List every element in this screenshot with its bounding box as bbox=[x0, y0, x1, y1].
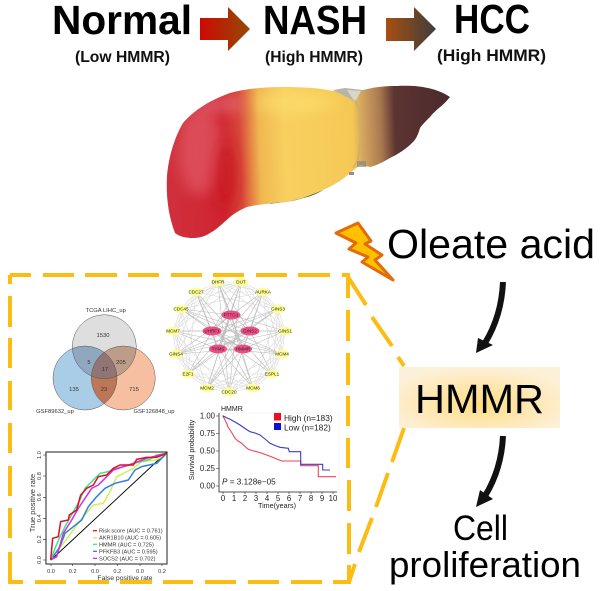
chart: protein interaction network: GINS4 bbox=[169, 352, 183, 357]
chart: ROC curves bbox=[28, 451, 167, 582]
chart: protein interaction network: MCM4 bbox=[275, 352, 289, 357]
chart: survival curve: 7 bbox=[298, 494, 302, 503]
chart: survival curve: 3 bbox=[254, 494, 258, 503]
panel: dashed callout frame bbox=[10, 275, 404, 582]
chart: survival curve: HMMR bbox=[221, 406, 243, 413]
chart: Venn diagram: GSF126848_up bbox=[134, 409, 174, 415]
chart: Venn diagram: 17 bbox=[102, 367, 108, 373]
text: Cell proliferation bbox=[389, 509, 581, 585]
text: Oleate acid: Oleate acid bbox=[387, 221, 595, 267]
chart: survival curve: Survival probability bbox=[187, 419, 196, 480]
chart: protein interaction network bbox=[166, 278, 292, 396]
chart: survival curve: 6 bbox=[287, 494, 291, 503]
chart: survival curve: 0.00 bbox=[200, 482, 216, 490]
arrow: Normal to NASH bbox=[200, 7, 250, 51]
chart: survival curve: 0.50 bbox=[200, 446, 216, 456]
chart: survival curve: Low (n=182) bbox=[284, 422, 331, 432]
chart: ROC curves: 0.8 bbox=[37, 472, 43, 480]
chart: ROC curves: AKR1B10 (AUC = 0.605) bbox=[99, 536, 161, 542]
chart: ROC curves: Risk score (AUC = 0.761) bbox=[99, 529, 163, 535]
arrow: HMMR to cell proliferation bbox=[476, 436, 503, 507]
chart: protein interaction network: CDC45 bbox=[173, 307, 189, 312]
chart: protein interaction network: UHRF1 bbox=[204, 329, 220, 334]
chart: ROC curves: 0.2 bbox=[158, 569, 166, 575]
chart: protein interaction network: TYMS bbox=[212, 347, 224, 352]
arrow: Oleate acid to HMMR bbox=[476, 282, 503, 353]
chart: ROC curves: False positive rate bbox=[97, 575, 153, 582]
chart: survival curve: 0 bbox=[221, 494, 226, 503]
chart: survival curve bbox=[187, 406, 339, 510]
chart: survival curve: 9 bbox=[320, 494, 324, 503]
chart: Venn diagram: 205 bbox=[116, 360, 126, 366]
chart: protein interaction network: MCM7 bbox=[166, 329, 180, 334]
chart: survival curve: Time(years) bbox=[258, 501, 296, 510]
chart: survival curve: 2 bbox=[243, 494, 247, 503]
chart: survival curve: 0.25 bbox=[200, 464, 216, 473]
chart: ROC curves: PFKFB3 (AUC = 0.595) bbox=[99, 549, 158, 555]
chart: protein interaction network: HMMR bbox=[236, 347, 251, 352]
chart: Venn diagram: GSF89632_up bbox=[36, 409, 74, 415]
chart: survival curve: High (n=183) bbox=[284, 413, 333, 423]
chart: ROC curves: 0.0 bbox=[91, 569, 99, 575]
chart: protein interaction network: GINS2 bbox=[243, 329, 257, 334]
chart: survival curve: 0.75 bbox=[200, 429, 216, 438]
chart: survival curve: 10 bbox=[329, 494, 338, 503]
chart: ROC curves: HMMR (AUC = 0.725) bbox=[99, 542, 154, 548]
chart: Venn diagram bbox=[36, 308, 174, 415]
chart: ROC curves: 1.0 bbox=[37, 451, 43, 459]
chart: Venn diagram: 23 bbox=[101, 387, 107, 393]
chart: ROC curves: 0.0 bbox=[37, 556, 43, 564]
chart: survival curve: 5 bbox=[276, 494, 281, 503]
chart: Venn diagram: TCGA LIHC_up bbox=[86, 308, 126, 314]
chart: protein interaction network: CDC20 bbox=[221, 390, 237, 395]
chart: survival curve: 4 bbox=[265, 494, 270, 503]
chart: protein interaction network: ESPL1 bbox=[265, 372, 280, 377]
chart: protein interaction network: CDC27 bbox=[188, 290, 204, 295]
chart: ROC curves: True positive rate bbox=[28, 474, 37, 532]
chart: Venn diagram: 715 bbox=[129, 387, 139, 393]
chart: survival curve: 8 bbox=[309, 494, 313, 503]
chart: ROC curves: 0.2 bbox=[113, 569, 121, 575]
chart: survival curve: P = 3.128e−05 bbox=[222, 478, 276, 486]
chart: ROC curves: 0.2 bbox=[69, 569, 77, 575]
title: Normal stage bbox=[52, 0, 192, 66]
arrow: NASH to HCC bbox=[386, 7, 436, 51]
chart: survival curve: 1.00 bbox=[200, 412, 216, 420]
title: HCC stage bbox=[437, 0, 546, 65]
text: Cell proliferation: Cell bbox=[453, 509, 508, 548]
chart: protein interaction network: MCM2 bbox=[200, 386, 214, 391]
icon: lightning bolt bbox=[336, 223, 393, 280]
chart: protein interaction network: GINS1 bbox=[278, 329, 292, 334]
chart: Venn diagram: 135 bbox=[69, 387, 79, 393]
chart: protein interaction network: MCM6 bbox=[246, 386, 260, 391]
chart: Venn diagram: 1530 bbox=[97, 333, 109, 339]
chart: ROC curves: 0.0 bbox=[136, 569, 144, 575]
chart: ROC curves: SOCS2 (AUC = 0.702) bbox=[99, 556, 156, 562]
illustration: liver bbox=[166, 86, 450, 238]
chart: Venn diagram: 5 bbox=[87, 360, 91, 366]
chart: protein interaction network: DUT bbox=[236, 280, 246, 285]
chart: ROC curves: 0.4 bbox=[37, 514, 43, 522]
chart: protein interaction network: GINS3 bbox=[271, 307, 285, 312]
chart: protein interaction network: AURKA bbox=[255, 290, 272, 295]
text: HMMR: HMMR bbox=[415, 376, 544, 422]
text: Cell proliferation: proliferation bbox=[389, 544, 581, 585]
title: NASH stage bbox=[263, 0, 367, 66]
subtitle: NASH High HMMR: (High HMMR) bbox=[265, 49, 363, 66]
chart: protein interaction network: E2F1 bbox=[183, 372, 194, 377]
subtitle: Low HMMR: (Low HMMR) bbox=[75, 49, 170, 66]
chart: survival curve: 1 bbox=[232, 494, 236, 503]
chart: protein interaction network: DHFR bbox=[212, 280, 225, 285]
chart: protein interaction network: PTTG1 bbox=[224, 313, 239, 318]
chart: ROC curves: 0.2 bbox=[37, 535, 43, 543]
subtitle: HCC High HMMR: (High HMMR) bbox=[437, 47, 546, 65]
chart: ROC curves: 0.6 bbox=[37, 493, 43, 501]
chart: ROC curves: 0.0 bbox=[47, 569, 55, 575]
box: HMMR bbox=[399, 367, 560, 428]
